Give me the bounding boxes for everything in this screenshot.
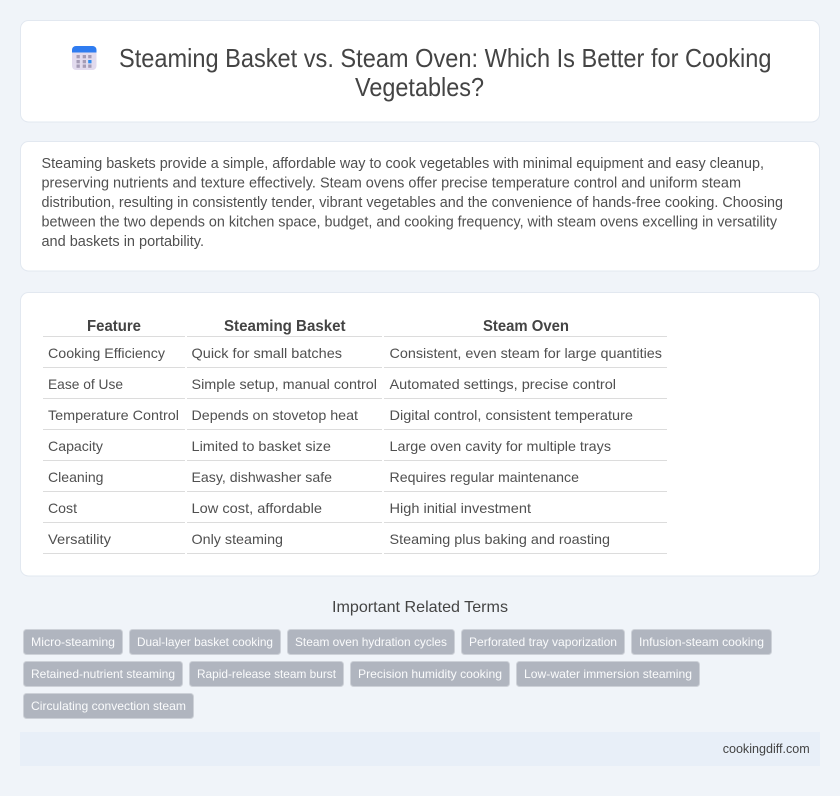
row: cost: High initial investment	[390, 500, 531, 516]
row: versatility	[48, 531, 610, 547]
row: ease of use	[48, 376, 616, 392]
row: cooking efficiency: Consistent, even steam for large quantities	[390, 345, 662, 361]
row: cleaning: Requires regular maintenance	[390, 469, 579, 485]
heading: important related terms: Important Related Terms	[332, 599, 508, 616]
row: capacity	[48, 438, 611, 454]
row: capacity: Large oven cavity for multiple trays	[390, 438, 611, 454]
row: temperature control: Temperature Control	[48, 407, 179, 423]
row: capacity: Limited to basket size	[192, 438, 331, 454]
tag: Steam oven hydration cycles	[295, 635, 447, 649]
title	[119, 45, 772, 102]
row: ease of use: Simple setup, manual control	[192, 376, 377, 392]
panel: summary paragraph: and baskets in portability.	[42, 234, 204, 250]
tag: Rapid-release steam burst	[197, 667, 337, 681]
row: capacity: Capacity	[48, 438, 103, 454]
footer	[20, 732, 820, 766]
title: Steaming Basket vs. Steam Oven: Which Is Better for Cooking	[119, 45, 772, 73]
tag: Micro-steaming	[31, 635, 115, 649]
row: temperature control: Digital control, consistent temperature	[390, 407, 633, 423]
row: cleaning: Cleaning	[48, 469, 104, 485]
tag	[288, 630, 454, 654]
tag: Infusion-steam cooking	[639, 635, 764, 649]
tag	[130, 630, 280, 654]
row: ease of use: Automated settings, precise control	[390, 376, 616, 392]
panel: summary paragraph: between the two depends on kitchen space, budget, and cooking frequency, with steam ovens excelling in versatility	[42, 214, 778, 230]
tag	[632, 630, 772, 654]
row: cost: Cost	[48, 500, 77, 516]
panel: related term tags	[24, 630, 772, 718]
tag: Dual-layer basket cooking	[137, 635, 273, 649]
tag	[350, 662, 510, 686]
tag: Low-water immersion steaming	[524, 667, 692, 681]
row: temperature control	[48, 407, 633, 423]
row: cooking efficiency	[48, 345, 662, 361]
row: cooking efficiency: Cooking Efficiency	[48, 345, 165, 361]
tag: Circulating convection steam	[31, 699, 186, 713]
tag	[462, 630, 624, 654]
panel: summary paragraph: Steaming baskets provide a simple, affordable way to cook vegetables with minimal equipment and easy cleanup,	[42, 156, 764, 172]
title: Vegetables?	[355, 74, 484, 102]
row: ease of use: Ease of Use	[48, 376, 123, 392]
tag: Perforated tray vaporization	[469, 635, 617, 649]
table header row: Steaming Basket	[224, 318, 346, 335]
tag	[516, 662, 700, 686]
footer: cookingdiff.com	[723, 741, 810, 756]
row: cleaning: Easy, dishwasher safe	[192, 469, 332, 485]
panel: summary paragraph: distribution, resulting in consistently tender, vibrant vegetables and the convenience of hands-free cooking. Choosing	[42, 195, 783, 211]
panel: comparison table	[20, 292, 820, 576]
row: versatility: Steaming plus baking and roasting	[390, 531, 610, 547]
panel: summary paragraph	[20, 142, 820, 271]
row: versatility: Versatility	[48, 531, 111, 547]
row: temperature control: Depends on stovetop heat	[192, 407, 358, 423]
table header row: Steam Oven	[483, 318, 569, 335]
row: cost: Low cost, affordable	[192, 500, 322, 516]
row: cleaning	[48, 469, 579, 485]
icon: calendar	[72, 46, 96, 70]
tag: Retained-nutrient steaming	[31, 667, 175, 681]
tag	[190, 662, 344, 686]
tag	[24, 630, 122, 654]
table header row	[87, 318, 569, 335]
row: cooking efficiency: Quick for small batches	[192, 345, 342, 361]
row: cost	[48, 500, 531, 516]
tag	[24, 662, 182, 686]
tag: Precision humidity cooking	[358, 667, 502, 681]
panel: title header	[20, 20, 820, 122]
row: versatility: Only steaming	[192, 531, 283, 547]
table header row: Feature	[87, 318, 141, 335]
tag	[24, 694, 194, 718]
panel: summary paragraph: preserving nutrients and texture effectively. Steam ovens offer precise temperature control and uniform steam	[42, 176, 741, 192]
